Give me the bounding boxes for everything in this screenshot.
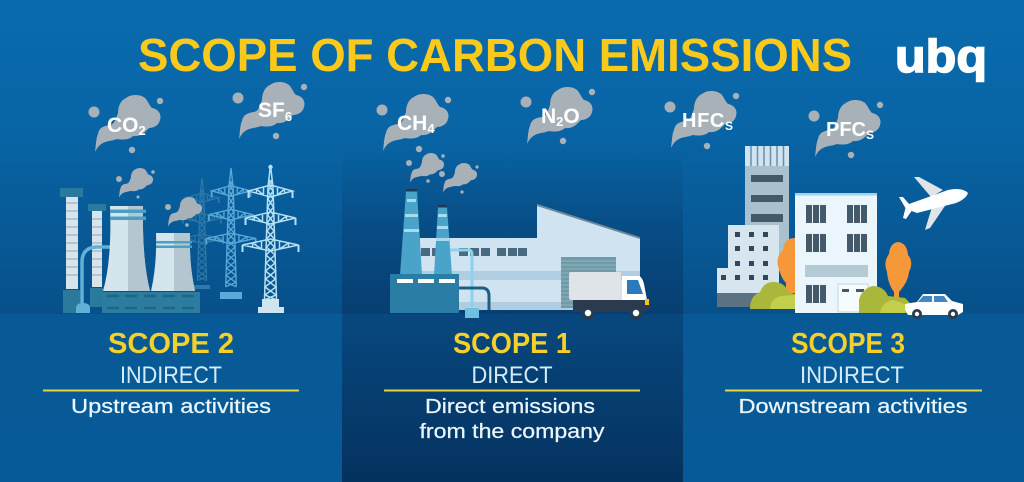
text block: scope 1: DIRECT	[472, 362, 553, 389]
text block: scope 2: SCOPE 2	[108, 328, 234, 360]
text block: scope 1: SCOPE 1	[453, 328, 571, 360]
logo: ubq: ubq	[895, 30, 987, 82]
panel: scope 2 illustration	[60, 82, 307, 313]
cloud: N2O: N	[541, 105, 556, 128]
icon: airplane	[899, 177, 968, 230]
panel: scope 1 illustration	[376, 87, 650, 320]
office buildings back	[717, 146, 789, 307]
cloud: HFCs: HFC	[682, 110, 724, 132]
chimneys	[60, 188, 110, 313]
factory building	[420, 204, 640, 310]
cloud: SF6: 6	[285, 109, 292, 124]
cloud: N2O	[520, 87, 595, 144]
text block: scope 3: INDIRECT	[800, 362, 904, 389]
text block: scope 3: Downstream activities	[738, 396, 968, 418]
tree and bush left	[750, 238, 795, 309]
icon: car	[905, 294, 963, 319]
title: SCOPE OF CARBON EMISSIONS	[138, 29, 852, 81]
small smoke clouds	[116, 168, 202, 227]
cloud: PFCs: S	[866, 128, 874, 142]
cloud: N2O: O	[563, 105, 580, 128]
cooling towers	[102, 206, 200, 313]
text block: scope 1	[384, 328, 640, 443]
text block: scope 2	[43, 328, 299, 418]
cloud: CO2: CO	[107, 114, 138, 137]
cloud: CH4: 4	[427, 121, 435, 136]
cloud: PFCs	[808, 100, 883, 158]
cloud: CO2	[88, 95, 163, 153]
text block: scope 2: INDIRECT	[120, 362, 222, 389]
truck	[569, 272, 650, 320]
transmission towers	[181, 165, 298, 313]
smokestacks	[390, 189, 489, 318]
text block: scope 1: from the company	[420, 421, 604, 443]
text block: scope 3: SCOPE 3	[791, 328, 905, 360]
main office building	[795, 193, 877, 313]
text block: scope 3	[725, 328, 982, 418]
cloud: SF6	[232, 82, 307, 139]
small smoke clouds	[406, 153, 479, 194]
text block: scope 1: Direct emissions	[425, 396, 595, 418]
cloud: CO2: 2	[138, 123, 146, 138]
cloud: CH4: CH	[397, 112, 427, 135]
panel: scope 3 illustration	[664, 91, 968, 319]
cloud: CH4	[376, 94, 451, 152]
cloud: N2O: 2	[556, 114, 563, 129]
cloud: PFCs: PFC	[826, 119, 866, 141]
cloud: HFCs	[664, 91, 739, 149]
text block: scope 2: Upstream activities	[71, 396, 271, 418]
tree and bush right	[859, 242, 913, 313]
cloud: SF6: SF	[258, 99, 285, 122]
cloud: HFCs: S	[725, 119, 733, 133]
